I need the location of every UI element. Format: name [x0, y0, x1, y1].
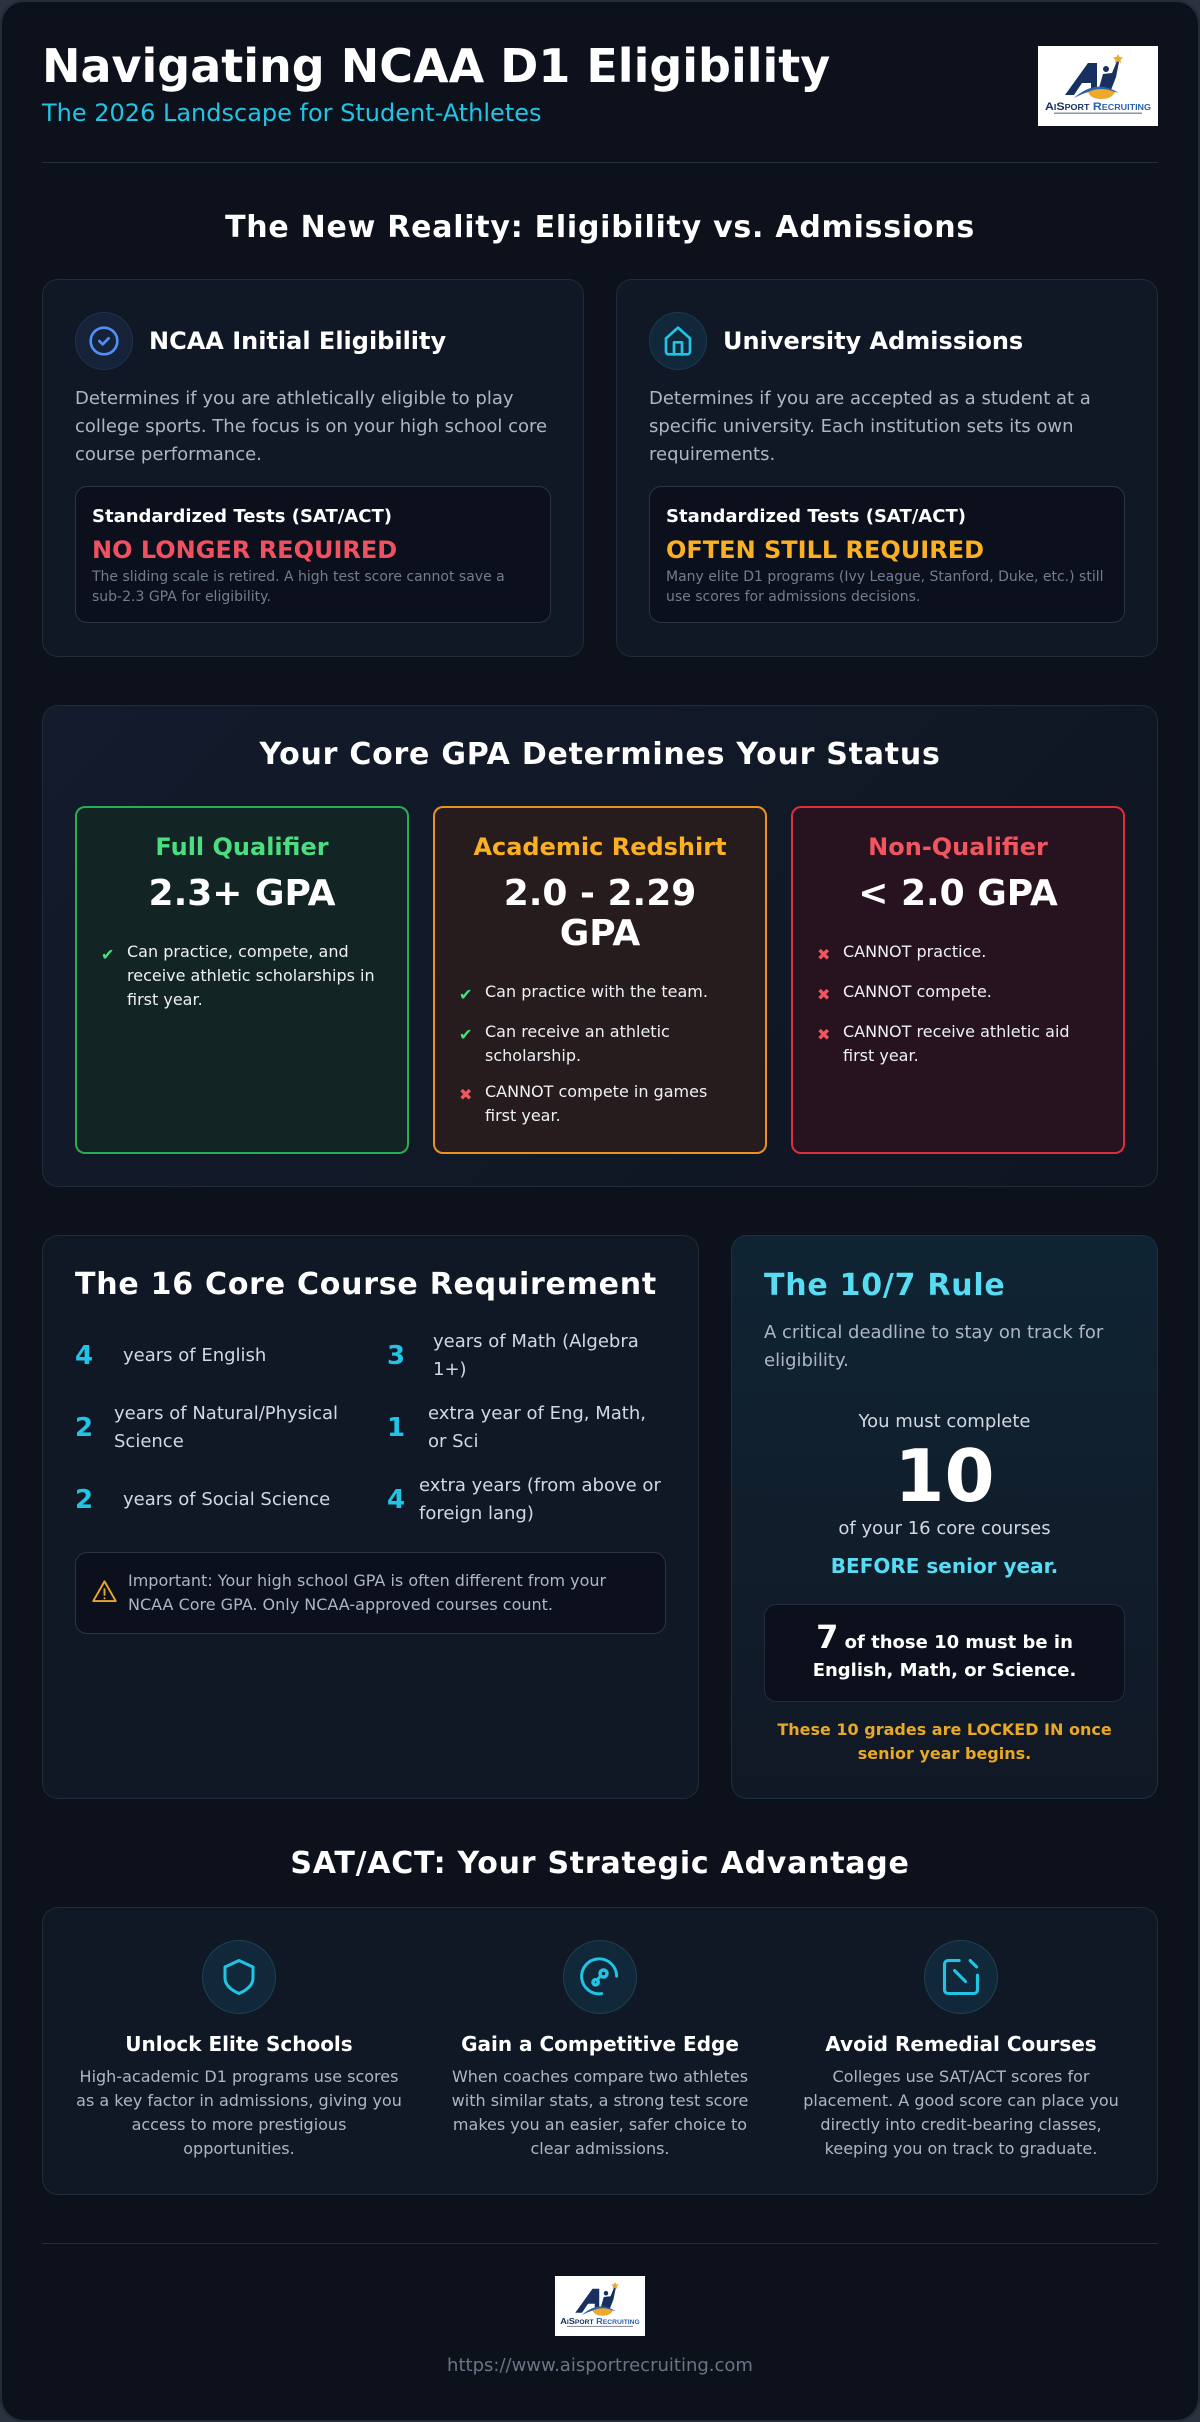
panel: 10/7 rule	[731, 1235, 1158, 1799]
big number block: BEFORE senior year.	[831, 1554, 1058, 1578]
panel: university admissions	[616, 279, 1158, 657]
big number block: of your 16 core courses	[838, 1518, 1051, 1539]
rule: no practice: ✖	[817, 945, 830, 964]
text: High-academic D1 programs use scores	[80, 2067, 398, 2086]
title: Avoid Remedial Courses	[825, 2032, 1097, 2056]
tier name: Non-Qualifier	[868, 833, 1048, 861]
note	[666, 569, 1104, 605]
rule: no practice: CANNOT practice.	[843, 942, 986, 961]
item: english	[75, 1341, 266, 1371]
note text	[128, 1571, 606, 1614]
big number block: 10	[894, 1434, 995, 1518]
icon: warning	[92, 1580, 117, 1602]
description: Determines if you are athletically eligible to play	[75, 388, 514, 409]
item: math: 3	[387, 1341, 405, 1371]
item: science: 2	[75, 1413, 93, 1443]
rule: practice: ✔	[459, 985, 472, 1004]
label: Standardized Tests (SAT/ACT)	[666, 506, 966, 527]
text: with similar stats, a strong test score	[452, 2091, 748, 2110]
rule: practice: Can practice with the team.	[485, 982, 708, 1001]
panel: 16 core courses	[42, 1235, 699, 1799]
note text: Important: Your high school GPA is often different from your	[128, 1571, 606, 1590]
icon: home	[649, 312, 707, 370]
text: directly into credit-bearing classes,	[820, 2115, 1102, 2134]
footer url: https://www.aisportrecruiting.com	[447, 2355, 753, 2376]
rule: no aid: CANNOT receive athletic aid	[843, 1022, 1070, 1041]
callout: tests no longer required	[75, 486, 551, 623]
big number block	[831, 1411, 1058, 1578]
rule: scholarship: scholarship.	[485, 1046, 581, 1065]
item: extra years	[387, 1475, 661, 1524]
subtitle: The 2026 Landscape for Student-Athletes	[42, 99, 542, 127]
item: extra year: or Sci	[428, 1431, 478, 1452]
logo	[1038, 46, 1158, 126]
item: science	[75, 1403, 338, 1452]
rule: scholarship: Can receive an athletic	[485, 1022, 670, 1041]
rule: no aid: ✖	[817, 1025, 830, 1044]
rule: can do all	[101, 942, 375, 1009]
item: math	[387, 1331, 639, 1380]
rule: no compete: ✖	[817, 985, 830, 1004]
section heading: strategic advantage: SAT/ACT: Your Strategic Advantage	[290, 1846, 910, 1881]
item: english: years of English	[123, 1345, 266, 1366]
description: college sports. The focus is on your high school core	[75, 416, 547, 437]
rule: scholarship: ✔	[459, 1025, 472, 1044]
card: full qualifier	[75, 806, 409, 1154]
rule: cannot compete: ✖	[459, 1085, 472, 1104]
heading: The 10/7 Rule	[764, 1268, 1005, 1303]
rule: can do all: receive athletic scholarships in	[127, 966, 375, 985]
benefit: remedial courses	[803, 1940, 1119, 2158]
rule: no aid	[817, 1022, 1070, 1065]
card heading: University Admissions	[723, 327, 1023, 355]
callout: 7 of 10	[764, 1604, 1125, 1702]
item: extra year	[387, 1403, 646, 1452]
rule: can do all: Can practice, compete, and	[127, 942, 349, 961]
note: sub-2.3 GPA for eligibility.	[92, 589, 271, 605]
item: english: 4	[75, 1341, 93, 1371]
GPA range: 2.0 - 2.29	[504, 873, 696, 914]
item: extra year: extra year of Eng, Math,	[428, 1403, 646, 1424]
note: use scores for admissions decisions.	[666, 589, 920, 605]
icon: shield	[202, 1940, 276, 2014]
title: Unlock Elite Schools	[125, 2032, 353, 2056]
text: Colleges use SAT/ACT scores for	[833, 2067, 1089, 2086]
description: A critical deadline to stay on track for	[764, 1322, 1103, 1343]
rule: cannot compete: first year.	[485, 1106, 561, 1125]
card heading: NCAA Initial Eligibility	[149, 327, 446, 355]
GPA range: < 2.0 GPA	[858, 873, 1058, 914]
logo: AiSport Recruiting	[1045, 101, 1151, 113]
status: OFTEN STILL REQUIRED	[666, 536, 984, 564]
item: social science: years of Social Science	[123, 1489, 330, 1510]
GPA range	[504, 873, 696, 954]
icon: check circle	[75, 312, 133, 370]
warning: locked in: These 10 grades are LOCKED IN once	[777, 1720, 1112, 1739]
rule: cannot compete	[459, 1082, 707, 1125]
callout: tests often required	[649, 486, 1125, 623]
panel: NCAA initial eligibility	[42, 279, 584, 657]
item: extra years: foreign lang)	[419, 1503, 534, 1524]
panel: strategic advantage	[42, 1907, 1158, 2195]
rule: scholarship	[459, 1022, 670, 1065]
tier name: Full Qualifier	[155, 833, 329, 861]
title: Navigating NCAA D1 Eligibility	[42, 39, 830, 93]
text	[803, 2067, 1119, 2158]
item: extra years: 4	[387, 1485, 405, 1515]
item: math: years of Math (Algebra	[433, 1331, 639, 1352]
description: course performance.	[75, 444, 262, 465]
footer logo	[555, 2276, 645, 2336]
text: access to more prestigious	[132, 2115, 346, 2134]
status: NO LONGER REQUIRED	[92, 536, 397, 564]
text: as a key factor in admissions, giving you	[76, 2091, 402, 2110]
note: The sliding scale is retired. A high test score cannot save a	[92, 569, 505, 585]
item: extra year: 1	[387, 1413, 405, 1443]
description: Determines if you are accepted as a student at a	[649, 388, 1091, 409]
card: academic redshirt	[433, 806, 767, 1154]
description: requirements.	[649, 444, 775, 465]
text: opportunities.	[183, 2139, 295, 2158]
description	[649, 388, 1091, 465]
text: keeping you on track to graduate.	[825, 2139, 1097, 2158]
text: makes you an easier, safer choice to	[453, 2115, 747, 2134]
text: placement. A good score can place you	[803, 2091, 1119, 2110]
icon: gauge	[563, 1940, 637, 2014]
panel: core GPA status	[42, 705, 1158, 1187]
tier name: Academic Redshirt	[473, 833, 727, 861]
text: clear admissions.	[530, 2139, 670, 2158]
description: eligibility.	[764, 1350, 849, 1371]
callout: 7 of 10: English, Math, or Science.	[813, 1660, 1076, 1681]
footer logo: AiSport Recruiting	[560, 2317, 640, 2326]
item: social science: 2	[75, 1485, 93, 1515]
benefit: competitive edge	[452, 1940, 748, 2158]
description	[75, 388, 547, 465]
text	[76, 2067, 402, 2158]
rule: can do all: ✔	[101, 945, 114, 964]
title: Gain a Competitive Edge	[461, 2032, 739, 2056]
section heading: new reality: The New Reality: Eligibility vs. Admissions	[225, 210, 975, 245]
big number block: You must complete	[859, 1411, 1030, 1432]
item: science: years of Natural/Physical	[114, 1403, 338, 1424]
note: Many elite D1 programs (Ivy League, Stanford, Duke, etc.) still	[666, 569, 1104, 585]
rule: cannot compete: CANNOT compete in games	[485, 1082, 707, 1101]
note	[92, 569, 505, 605]
description	[764, 1322, 1104, 1371]
rule: no aid: first year.	[843, 1046, 919, 1065]
heading: The 16 Core Course Requirement	[75, 1267, 657, 1302]
text: When coaches compare two athletes	[452, 2067, 748, 2086]
callout: important note	[75, 1552, 666, 1634]
warning: locked in: senior year begins.	[858, 1744, 1031, 1763]
GPA range: GPA	[560, 913, 640, 954]
card: non-qualifier	[791, 806, 1125, 1154]
text	[452, 2067, 748, 2158]
item: science: Science	[114, 1431, 184, 1452]
GPA range: 2.3+ GPA	[149, 873, 335, 914]
item: social science	[75, 1485, 330, 1515]
benefit: elite schools	[76, 1940, 402, 2158]
warning: locked in	[777, 1720, 1112, 1763]
section heading: Your Core GPA Determines Your Status	[259, 737, 941, 772]
rule: no compete: CANNOT compete.	[843, 982, 992, 1001]
rule: can do all: first year.	[127, 990, 203, 1009]
note text: NCAA Core GPA. Only NCAA-approved courses count.	[128, 1595, 553, 1614]
description: specific university. Each institution sets its own	[649, 416, 1074, 437]
callout: 7 of 10: 7 of those 10 must be in	[816, 1618, 1073, 1656]
item: extra years: extra years (from above or	[419, 1475, 661, 1496]
icon: square arrow	[924, 1940, 998, 2014]
header	[42, 39, 1158, 127]
label: Standardized Tests (SAT/ACT)	[92, 506, 392, 527]
item: math: 1+)	[433, 1359, 467, 1380]
